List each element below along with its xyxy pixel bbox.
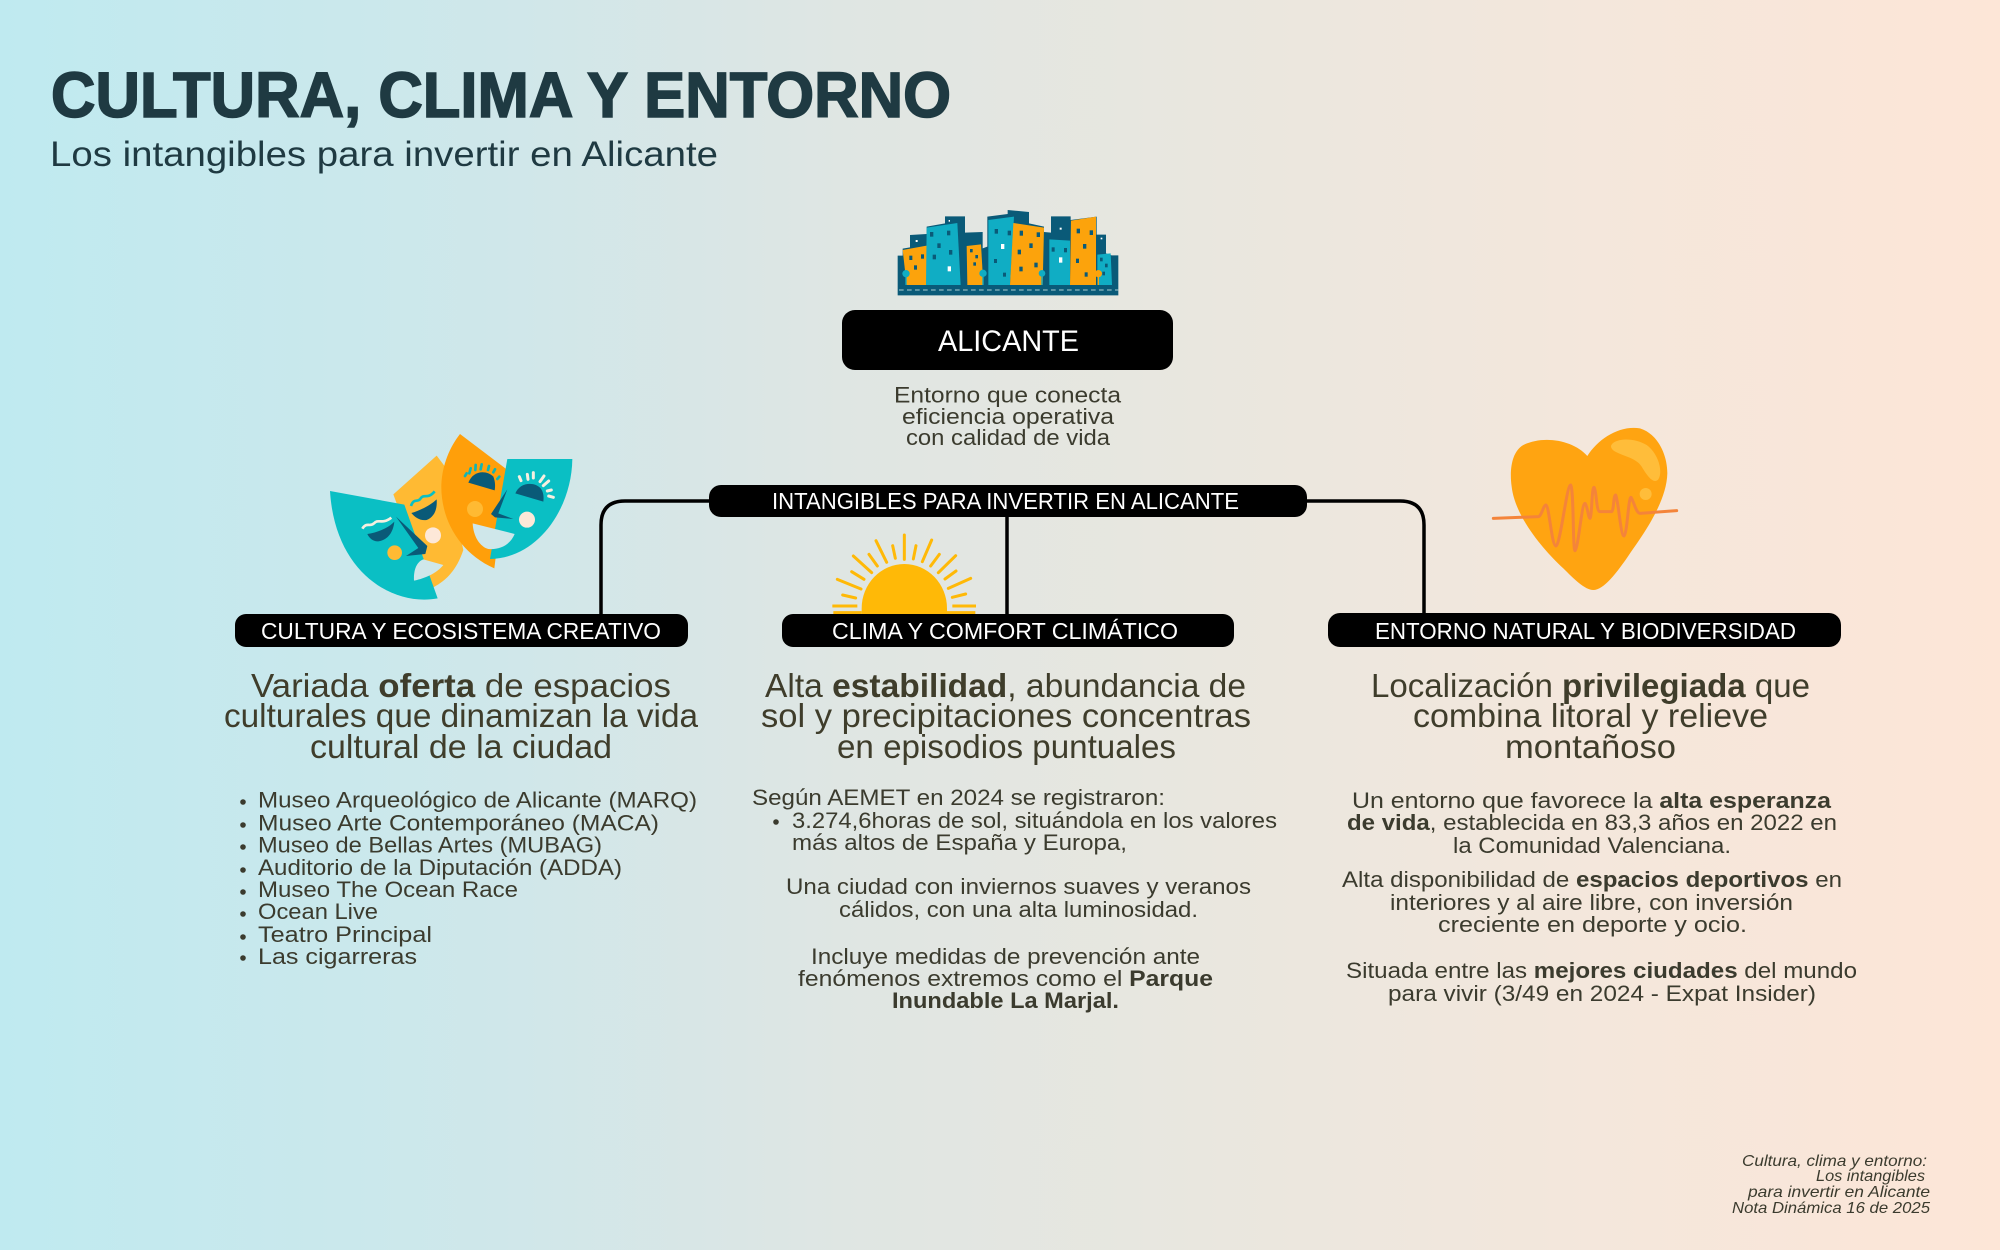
- text: entorno details: interiores y al aire libre, con inversión: [1390, 890, 1793, 915]
- heading: cultura: [224, 667, 699, 765]
- heading: entorno: Localización privilegiada que: [1371, 667, 1810, 704]
- title: CULTURA, CLIMA Y ENTORNO: [51, 59, 951, 131]
- text: entorno details: de vida, establecida en 83,3 años en 2022 en: [1347, 810, 1837, 835]
- text: clima details: más altos de España y Europa,: [792, 830, 1127, 855]
- text: clima details: [752, 785, 1277, 1013]
- text: intro: con calidad de vida: [906, 425, 1111, 450]
- list: venues: Museo Arqueológico de Alicante (MARQ): [258, 788, 697, 812]
- list: venues: Museo The Ocean Race: [258, 877, 518, 902]
- heading: entorno: montañoso: [1505, 728, 1676, 765]
- header box: Alicante: [842, 310, 1173, 370]
- icon: heart with pulse: [1493, 428, 1677, 590]
- text: clima details: Inundable La Marjal.: [892, 988, 1119, 1013]
- list: venues: Auditorio de la Diputación (ADDA): [258, 855, 622, 880]
- footer note: Cultura, clima y entorno:: [1742, 1153, 1927, 1170]
- text: clima details: 3.274,6horas de sol, situándola en los valores: [792, 808, 1277, 833]
- text: intro: eficiencia operativa: [902, 404, 1115, 429]
- header box: intangibles: [709, 485, 1307, 517]
- footer note: [1732, 1153, 1930, 1217]
- text: entorno details: la Comunidad Valenciana.: [1453, 833, 1731, 858]
- label: clima: CLIMA Y COMFORT CLIMÁTICO: [832, 618, 1178, 644]
- text: entorno details: [1342, 788, 1857, 1006]
- icon: theatre masks: [330, 434, 572, 600]
- list: venues: Teatro Principal: [258, 922, 432, 947]
- heading: clima: en episodios puntuales: [837, 728, 1176, 765]
- label: cultura: CULTURA Y ECOSISTEMA CREATIVO: [261, 618, 661, 644]
- text: entorno details: para vivir (3/49 en 2024 - Expat Insider): [1388, 981, 1816, 1006]
- text: intro: Entorno que conecta: [894, 382, 1122, 408]
- label: entorno: [1328, 613, 1841, 647]
- heading: cultura: culturales que dinamizan la vida: [224, 697, 699, 734]
- text: intro: [894, 382, 1122, 450]
- footer note: Los intangibles: [1816, 1168, 1925, 1185]
- list: venues: Ocean Live: [258, 899, 378, 924]
- list: venues: Las cigarreras: [258, 944, 417, 969]
- panel: clima: [752, 614, 1277, 1013]
- text: clima details: Una ciudad con inviernos suaves y veranos: [786, 874, 1251, 899]
- connector lines: [601, 501, 1424, 614]
- text: entorno details: creciente en deporte y ocio.: [1438, 912, 1747, 937]
- text: clima details: cálidos, con una alta luminosidad.: [839, 897, 1198, 922]
- text: entorno details: Situada entre las mejores ciudades del mundo: [1346, 958, 1857, 983]
- label: clima: [782, 614, 1234, 647]
- heading: entorno: combina litoral y relieve: [1413, 697, 1768, 734]
- list: venues: Museo Arte Contemporáneo (MACA): [258, 810, 659, 836]
- text: clima details: Según AEMET en 2024 se registraron:: [752, 785, 1165, 810]
- list: venues: [240, 788, 697, 969]
- header box: Alicante: ALICANTE: [938, 325, 1079, 358]
- footer note: para invertir en Alicante: [1747, 1184, 1930, 1201]
- text: entorno details: Un entorno que favorece la alta esperanza: [1352, 788, 1832, 813]
- heading: clima: sol y precipitaciones concentras: [761, 697, 1251, 734]
- text: clima details: fenómenos extremos como el Parque: [798, 966, 1213, 991]
- heading: cultura: cultural de la ciudad: [310, 728, 612, 765]
- panel: cultura: [224, 614, 699, 969]
- icon: sun: [832, 535, 976, 614]
- text: clima details: Incluye medidas de prevención ante: [811, 944, 1200, 969]
- label: entorno: ENTORNO NATURAL Y BIODIVERSIDAD: [1375, 618, 1796, 644]
- heading: clima: Alta estabilidad, abundancia de: [765, 667, 1246, 704]
- subtitle: Los intangibles para invertir en Alicante: [50, 135, 718, 174]
- text: entorno details: Alta disponibilidad de espacios deportivos en: [1342, 867, 1842, 892]
- heading: entorno: [1371, 667, 1810, 765]
- panel: entorno: [1328, 613, 1857, 1006]
- heading: clima: [761, 667, 1251, 765]
- icon: city skyline: [898, 210, 1118, 295]
- header box: intangibles: INTANGIBLES PARA INVERTIR EN ALICANTE: [772, 488, 1239, 514]
- heading: cultura: Variada oferta de espacios: [251, 667, 671, 704]
- footer note: Nota Dinámica 16 de 2025: [1732, 1200, 1930, 1217]
- list: venues: Museo de Bellas Artes (MUBAG): [258, 832, 602, 858]
